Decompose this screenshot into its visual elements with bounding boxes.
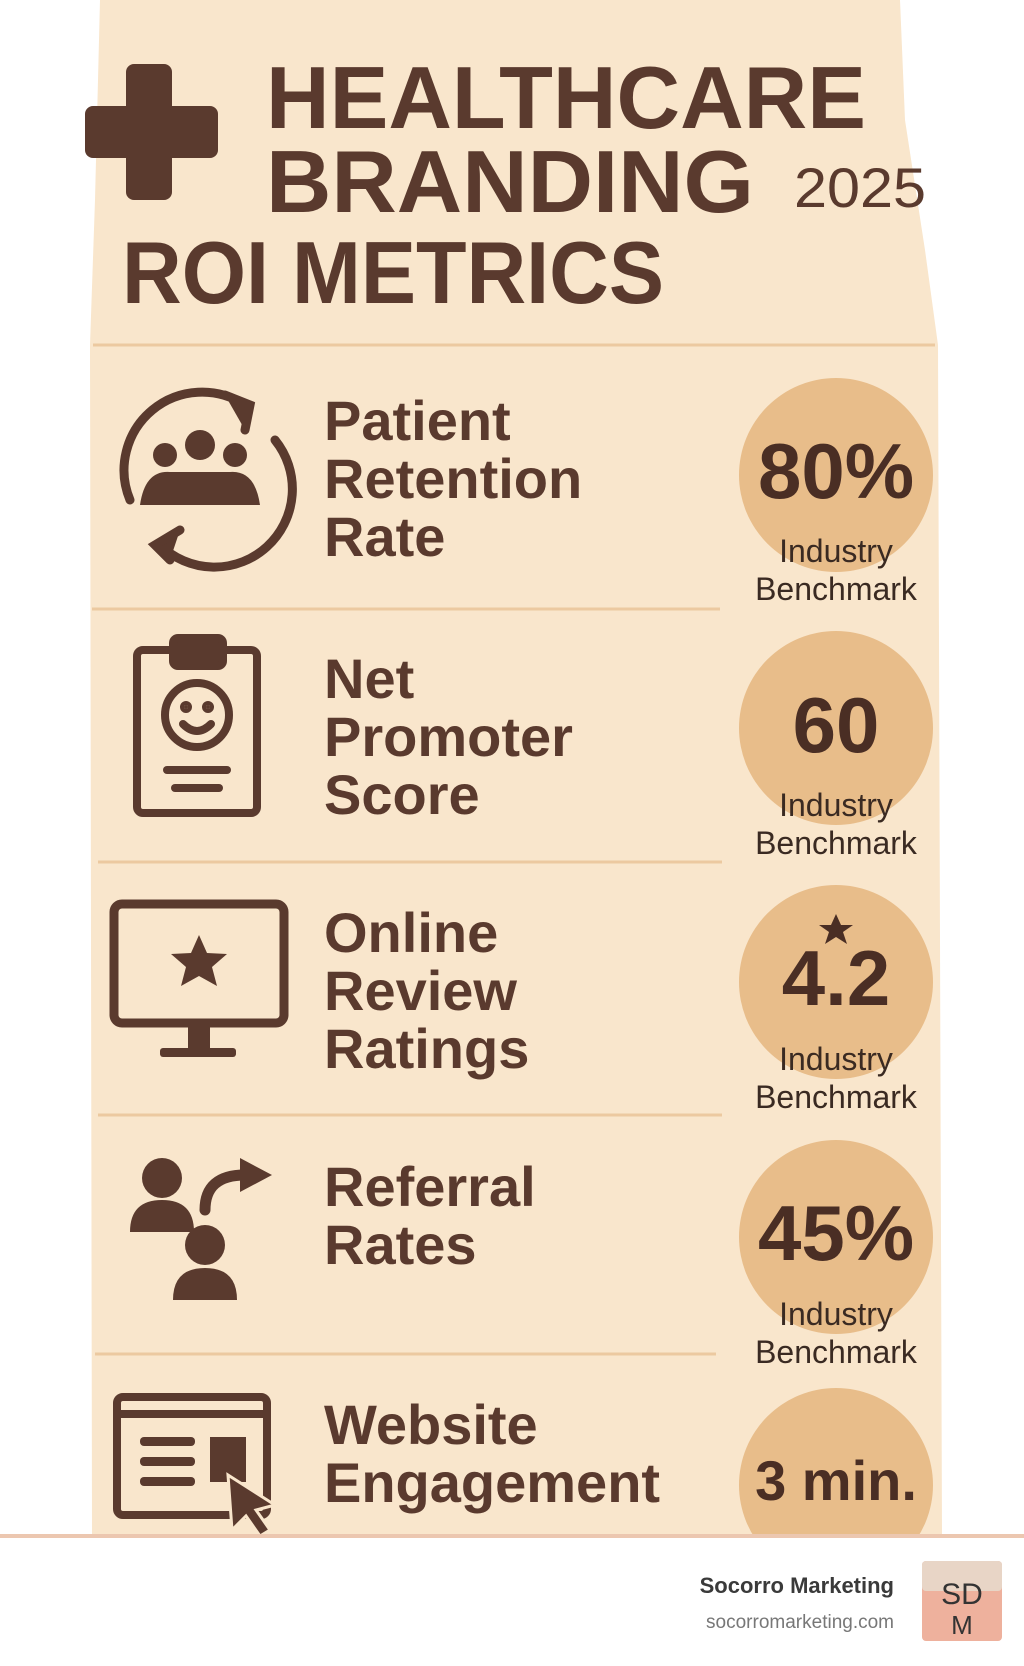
- stat circle: 45%: [758, 1189, 914, 1277]
- panel: background: [90, 0, 942, 1536]
- label: Score: [324, 763, 480, 826]
- stat circle: Industry: [779, 1296, 893, 1332]
- icon: medical cross: [85, 64, 218, 200]
- brand text: [700, 1573, 894, 1633]
- label: Rate: [324, 505, 445, 568]
- row: online reviews: [114, 885, 933, 1115]
- icon: referral people: [130, 1158, 272, 1300]
- label: Review: [324, 959, 517, 1022]
- label: [324, 647, 573, 826]
- logo: [922, 1561, 1002, 1641]
- label: Patient: [324, 389, 511, 452]
- icon: browser cursor: [117, 1397, 275, 1536]
- stat circle: [739, 631, 933, 861]
- label: [324, 1155, 536, 1276]
- label: Rates: [324, 1213, 477, 1276]
- label: Website: [324, 1393, 538, 1456]
- label: Net: [324, 647, 414, 710]
- footer: [0, 1536, 1024, 1666]
- title: BRANDING: [266, 132, 754, 231]
- logo: M: [951, 1610, 973, 1640]
- icon: retention cycle: [124, 392, 292, 567]
- stat circle: 60: [793, 681, 879, 769]
- title: HEALTHCARE: [266, 48, 866, 147]
- logo: SD: [941, 1578, 983, 1611]
- row: website engagement: [117, 1388, 933, 1582]
- stat circle: Benchmark: [755, 1079, 918, 1115]
- stat circle: [739, 1140, 933, 1370]
- label: Online: [324, 901, 498, 964]
- brand text: Socorro Marketing: [700, 1573, 894, 1598]
- stat circle: Industry: [779, 787, 893, 823]
- stat circle: Industry: [779, 1041, 893, 1077]
- label: [324, 389, 582, 568]
- stat circle: [739, 885, 933, 1115]
- stat circle: [739, 378, 933, 607]
- label: Referral: [324, 1155, 536, 1218]
- label: Ratings: [324, 1017, 529, 1080]
- icon: monitor star: [114, 904, 284, 1057]
- label: Engagement: [324, 1451, 660, 1514]
- stat circle: 3 min.: [755, 1449, 917, 1512]
- row: referrals: [130, 1140, 933, 1370]
- title: 2025: [794, 156, 926, 219]
- brand text: socorromarketing.com: [706, 1612, 894, 1633]
- stat circle: Benchmark: [755, 571, 918, 607]
- stat circle: Benchmark: [755, 825, 918, 861]
- label: Promoter: [324, 705, 573, 768]
- row: NPS: [137, 631, 933, 861]
- label: Retention: [324, 447, 582, 510]
- title: [122, 48, 926, 322]
- stat circle: Industry: [779, 533, 893, 569]
- stat circle: 80%: [758, 427, 914, 515]
- label: [324, 901, 529, 1080]
- row: patient retention: [124, 378, 933, 607]
- stat circle: Benchmark: [755, 1334, 918, 1370]
- stat circle: 4.2: [782, 934, 890, 1022]
- icon: clipboard smiley: [137, 638, 257, 813]
- title: ROI METRICS: [122, 223, 664, 322]
- label: [324, 1393, 660, 1514]
- stat circle: [739, 1388, 933, 1582]
